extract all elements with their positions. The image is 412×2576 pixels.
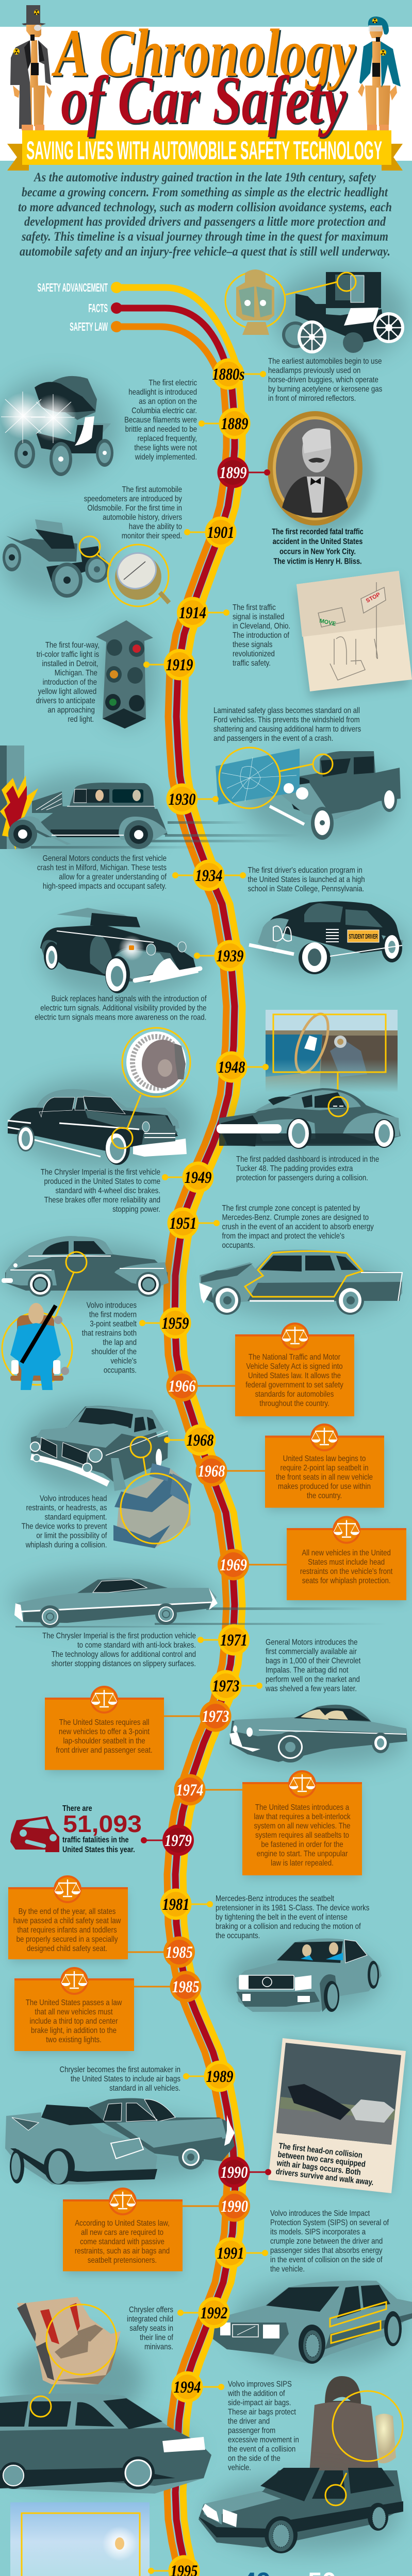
text: driver's education: The first driver's education program in	[248, 866, 362, 875]
text: GM airbags: perform well on the market and	[266, 1675, 360, 1684]
law box 1969: All new vehicles in the United	[302, 1549, 391, 1557]
text: first speedometers: The first automobile	[122, 485, 182, 494]
year badges: 1985	[172, 1977, 199, 1996]
text: Chrysler anti-lock brakes: shorter stopping distances on slippery surfaces.	[52, 1659, 196, 1668]
photo caption: with air bags occurs. Both	[276, 2159, 361, 2177]
law box 1968: United States law begins to	[283, 1454, 366, 1463]
1995: daytime running lights	[5, 2502, 191, 2576]
header	[0, 5, 412, 171]
1971: Chrysler Imperial anti-lock brakes	[10, 1571, 387, 1628]
text: crumple zone: from the impact and protect the vehicle's	[222, 1232, 344, 1241]
crash dummy in helmet	[358, 16, 401, 130]
law box 1968: the front seats in all new vehicle	[276, 1473, 373, 1482]
text: first recorded fatal accident: The victim is Henry H. Bliss.	[273, 557, 362, 566]
legend: SAFETY LAW	[70, 320, 108, 333]
1974: law box: be fastened in order for the	[261, 1840, 343, 1849]
icon: crashed car	[10, 1816, 59, 1852]
1939: Buick with turn signal	[40, 908, 206, 999]
student driver sign	[348, 930, 379, 942]
intro text: As the automotive industry gained traction in the late 19th century, safety	[33, 171, 376, 184]
text: seatbelt pretensioner: the occupants.	[216, 1931, 260, 1940]
text: earliest automobiles: headlamps previously used on	[268, 366, 360, 375]
year badges: 1968	[198, 1462, 225, 1481]
minivan	[0, 2393, 211, 2494]
text: Volvo head restraints: whiplash during a collision.	[25, 1540, 107, 1550]
text: Volvo 3-point seatbelt: that restrains both	[82, 1329, 137, 1338]
year labels: 1981	[162, 1895, 189, 1914]
seat	[17, 2297, 121, 2384]
law box 1969: seats for whiplash protection.	[302, 1577, 391, 1585]
text: GM airbags: Impalas. The airbag did not	[266, 1666, 349, 1675]
year labels: 1994	[174, 2378, 201, 2397]
year labels: 1889	[221, 414, 248, 433]
law box 1990: restraints, such as air bags and	[75, 2247, 170, 2256]
text: Chrysler disc brakes: These brakes offer more reliability and	[44, 1196, 160, 1205]
text: Volvo side-impact air bags: These air bags protect	[228, 2408, 296, 2417]
text: Chrysler disc brakes: produced in the United States to come	[44, 1177, 160, 1186]
text: seatbelt pretensioner: Mercedes-Benz introduces the seatbelt	[216, 1894, 334, 1903]
text: earliest automobiles: horse-driven buggies, which operate	[268, 376, 378, 384]
text: first four-way light: Michigan. The	[55, 669, 97, 677]
text: first four-way light: drivers to anticipate	[36, 697, 95, 705]
year labels: 1971	[220, 1631, 248, 1650]
law box 1990: seatbelt pretensioners.	[88, 2256, 157, 2265]
text: Volvo 3-point seatbelt: occupants.	[104, 1366, 137, 1375]
text: Volvo SIPS: in the event of collision on the side of	[270, 2256, 383, 2264]
text: Volvo side-impact air bags: Volvo improves SIPS	[228, 2380, 292, 2389]
year labels: 1948	[218, 1058, 245, 1077]
text: first speedometers: Oldsmobile. For the first time in	[87, 504, 182, 513]
text: GM airbags: first commercially available air	[266, 1647, 357, 1656]
year labels: 1919	[166, 655, 193, 674]
year labels: 1949	[185, 1168, 211, 1187]
seatbelt dummy	[2, 1303, 72, 1390]
year labels	[161, 365, 248, 2576]
text: first traffic signal: signal is installed	[233, 613, 284, 621]
text: Buick turn signals: electric turn signals means more awareness on the road.	[35, 1013, 206, 1022]
year badges	[159, 359, 251, 2576]
text: padded dashboard: The first padded dashboard is introduced in the	[236, 1155, 379, 1164]
1979: traffic fatalities fact: United States this year.	[62, 1845, 135, 1854]
law box 1966: The National Traffic and Motor	[249, 1353, 340, 1362]
law box 1966: Vehicle Safety Act is signed into	[246, 1362, 343, 1371]
text: laminated glass: Ford vehicles. This prevents the windshield from	[213, 716, 360, 724]
law box 1969	[287, 1516, 406, 1603]
text: Volvo head restraints: or limit the possibility of	[36, 1531, 107, 1540]
year labels: 1901	[207, 523, 234, 542]
law box 1985 brake light: include a third top and center	[29, 2017, 118, 2026]
1974: law box: system requires all seatbelts to	[255, 1831, 349, 1840]
year labels: 1968	[187, 1431, 213, 1450]
text: first four-way light: red light.	[68, 715, 94, 724]
text: first speedometers: have the ability to	[129, 522, 182, 531]
text: Volvo SIPS: passenger sides that absorbs energy	[270, 2246, 383, 2255]
1990: polaroid of head-on collision	[268, 2038, 406, 2193]
legend	[38, 281, 122, 333]
1974: law box	[242, 1770, 362, 1877]
law box 1985 brake light: brake light, in addition to the	[31, 2026, 117, 2035]
law box 1969: States must include head	[308, 1558, 385, 1567]
text: crumple zone: occupants.	[222, 1241, 255, 1250]
1901: Oldsmobile and speedometer	[0, 519, 169, 606]
text: first four-way light: introduction of the	[43, 678, 97, 687]
year labels: 1959	[162, 1314, 189, 1333]
text: Buick turn signals: Buick replaces hand signals with the introduction of	[52, 994, 207, 1004]
text: first traffic signal: revolutionized	[233, 650, 275, 658]
student driver sign: STUDENT DRIVER	[349, 933, 378, 940]
text: first electric headlight: widely implemented.	[135, 453, 197, 462]
text: first four-way light: tri-color traffic light is	[37, 650, 99, 659]
text: Chrysler air bags: the United States to include air bags	[71, 2075, 180, 2083]
1948: Tucker car	[217, 1088, 401, 1157]
1899: portrait of Henry H. Bliss	[268, 411, 374, 533]
1919: four-way traffic light	[95, 620, 157, 728]
1930: Ford truck and shattered windshield	[216, 748, 401, 842]
header white band	[0, 27, 412, 161]
text: padded dashboard: Tucker 48. The padding provides extra	[236, 1164, 353, 1173]
text: Volvo side-impact air bags: on the side of the	[228, 2454, 281, 2463]
1889: electric car with lights	[0, 376, 119, 479]
text: Volvo head restraints: restraints, or headrests, as	[26, 1503, 107, 1513]
law box 1985 brake light: that all new vehicles must	[35, 2008, 113, 2016]
year labels: 1939	[217, 946, 243, 965]
1973: law box: lap-shoulder seatbelt in the	[63, 1737, 145, 1745]
1880s: buggy with headlamp	[225, 268, 407, 361]
law box 1985 brake light: The United States passes a law	[26, 1998, 122, 2007]
text: GM airbags: was shelved a few years later.	[265, 1684, 357, 1693]
text: seatbelt pretensioner: pretensioner in its 1981 S-Class. The device works	[216, 1904, 369, 1912]
text: Volvo 3-point seatbelt: the first modern	[89, 1310, 137, 1319]
text: first recorded fatal accident: occurs in New York City.	[279, 547, 356, 556]
law box 1968	[265, 1423, 384, 1510]
year labels: 1951	[170, 1214, 196, 1233]
text: first four-way light: installed in Detroit,	[42, 659, 98, 668]
text: seatbelt pretensioner: by tightening the belt in the event of intense	[216, 1913, 348, 1922]
text: first electric headlight: these lights were not	[134, 444, 197, 452]
text: Chrysler disc brakes: standard with 4-wheel disc brakes.	[55, 1187, 160, 1195]
1974: law box: The United States introduces a	[255, 1803, 350, 1812]
1968: Volvo with head restraints	[21, 1401, 192, 1548]
year badges: 1990	[221, 2163, 248, 2182]
legend: SAFETY ADVANCEMENT	[38, 281, 108, 294]
text: earliest automobiles: by burning acetylene or kerosene gas	[268, 385, 382, 394]
text: GM crash test: General Motors conducts the first vehicle	[43, 854, 167, 863]
text: Volvo 3-point seatbelt: vehicle's	[111, 1357, 137, 1366]
text: first four-way light: an approaching	[47, 706, 95, 715]
law box 1966: United States law. It allows the	[248, 1371, 341, 1380]
law box 1968: require 2-point lap seatbelt in	[280, 1464, 369, 1472]
text: Chrysler child seats: safety seats in	[129, 2324, 173, 2333]
headlamp callout	[225, 269, 356, 335]
text: Chrysler air bags: Chrysler becomes the first automaker in	[60, 2065, 180, 2074]
1930: crash test car	[0, 745, 299, 866]
text: Volvo head restraints: standard equipment.	[45, 1513, 107, 1522]
text: Volvo side-impact air bags: passenger from	[228, 2426, 275, 2435]
text: GM airbags: bags in 1,000 of their Chevrolet	[266, 1656, 360, 1666]
text: Chrysler anti-lock brakes: The technology allows for additional control and	[52, 1650, 196, 1659]
law box 1985 child seat: designed child safety seat.	[27, 1944, 107, 1953]
text: Chrysler child seats: Chrysler offers	[129, 2306, 173, 2314]
year badges: 1899	[220, 463, 246, 482]
text: Volvo side-impact air bags: with the addition of	[227, 2389, 285, 2398]
text: crumple zone: Mercedes-Benz. Crumple zones are designed to	[222, 1213, 369, 1222]
year badges: 1969	[220, 1555, 247, 1574]
text: first electric headlight: headlight is introduced	[128, 388, 197, 397]
year labels: 1914	[179, 603, 206, 622]
law box 1985 brake light: two existing lights.	[46, 2036, 102, 2044]
text: first electric headlight: Because filaments were	[124, 416, 197, 425]
1974: law box: engine to start. The unpopular	[257, 1850, 348, 1858]
text: Chrysler disc brakes: The Chrysler Imperial is the first vehicle	[41, 1168, 160, 1177]
text: first electric headlight: as an option on the	[139, 397, 197, 406]
text: Chrysler anti-lock brakes: The Chrysler Imperial is the first production vehicle	[42, 1632, 196, 1640]
text: Chrysler child seats: minivans.	[144, 2343, 173, 2351]
year labels: 1934	[195, 866, 222, 885]
text: Volvo side-impact air bags: side-impact air bags.	[228, 2398, 291, 2408]
law box 1966: standards for automobiles	[255, 1390, 334, 1399]
photo caption: drivers survive and walk away.	[275, 2167, 374, 2188]
crash dummy in top hat	[10, 5, 52, 130]
speedometer callout	[79, 536, 169, 606]
law box 1990: all new cars are required to	[81, 2228, 163, 2237]
text: first traffic signal: The introduction of	[233, 631, 290, 640]
1974: law box: law that requires a belt-interlock	[254, 1812, 351, 1821]
text: driver's education: the United States is launched at a high	[248, 875, 365, 884]
text: Volvo 3-point seatbelt: shoulder of the	[91, 1347, 137, 1357]
1948: dashboard image	[266, 1010, 398, 1097]
text: Chrysler disc brakes: stopping power.	[112, 1205, 160, 1214]
intro text	[18, 171, 392, 259]
photo caption: between two cars equipped	[277, 2150, 366, 2169]
law box 1966	[235, 1323, 354, 1419]
text: Volvo SIPS: Volvo introduces the Side Impact	[270, 2209, 370, 2218]
1979: traffic fatalities fact: traffic fatalities in the	[62, 1836, 129, 1844]
text: first speedometers: speedometers are introduced by	[84, 495, 183, 503]
1992: child seat and minivan	[10, 2297, 144, 2421]
1989: Chrysler cars	[5, 2098, 235, 2184]
text: Volvo side-impact air bags: excessive movement in	[228, 2435, 299, 2445]
text: crumple zone: The first crumple zone concept is patented by	[222, 1204, 360, 1213]
law box 1985 child seat: that requires infants and toddlers	[17, 1926, 117, 1935]
year badges: 1973	[202, 1707, 229, 1726]
text: GM crash test: crash test in Milford, Michigan. These tests	[37, 863, 167, 872]
year labels: 1930	[169, 790, 195, 809]
1973: law box: The United States requires all	[59, 1718, 149, 1727]
text: first traffic signal: in Cleveland, Ohio.	[233, 622, 290, 631]
49 of 50 states fact	[241, 2567, 367, 2576]
text: GM crash test: high-speed impacts and occupant safety.	[43, 882, 167, 891]
text: padded dashboard: protection for passengers during a collision.	[236, 1174, 368, 1182]
law box 1990: come standard with passive	[80, 2238, 164, 2246]
text: Volvo SIPS: the vehicle.	[270, 2265, 305, 2274]
text: Volvo side-impact air bags: vehicle.	[228, 2463, 251, 2472]
text: first traffic signal: traffic safety.	[233, 659, 271, 668]
text: Volvo head restraints: The device works to prevent	[22, 1522, 107, 1531]
year labels: 1991	[217, 2244, 244, 2263]
text: first four-way light: yellow light allowed	[38, 687, 96, 696]
law box 1968: makes produced for use within	[278, 1482, 371, 1491]
ribbon: subtitle banner	[7, 130, 403, 171]
law box 1985 child seat	[8, 1875, 128, 1962]
1981: Mercedes S-Class	[227, 1938, 382, 2014]
year badges: 1985	[166, 1943, 193, 1962]
1973: law box: front driver and passenger seat.	[56, 1746, 153, 1755]
text: first electric headlight: The first electric	[149, 379, 197, 387]
text: Volvo head restraints: Volvo introduces head	[40, 1494, 107, 1503]
photo caption: The first head-on collision	[278, 2142, 363, 2160]
1979: traffic fatalities fact: There are	[62, 1804, 92, 1813]
year badges: 1979	[164, 1831, 192, 1850]
1974: law box: system on all new vehicles. The	[254, 1822, 351, 1831]
text: laminated glass: shattering and causing additional harm to drivers	[213, 725, 361, 734]
text: seatbelt pretensioner: braking or a collision and reducing the motion of	[216, 1922, 361, 1931]
year labels: 1989	[206, 2067, 233, 2086]
year labels: 1880s	[212, 365, 245, 384]
legend: FACTS	[88, 302, 108, 315]
text: Chrysler anti-lock brakes: to come standard with anti-lock brakes.	[77, 1641, 196, 1650]
text: first speedometers: automobile history, drivers	[103, 513, 182, 522]
year badges: 1990	[221, 2197, 248, 2216]
text: earliest automobiles: The earliest automobiles begin to use	[268, 357, 382, 366]
1949: Chrysler Imperial with disc brake	[8, 1028, 196, 1170]
1994: seat with side airbag	[309, 2376, 403, 2473]
law box 1966: federal government to set safety	[245, 1381, 343, 1389]
1973: Impala with airbag	[229, 1705, 407, 1767]
text: first recorded fatal accident: The first recorded fatal traffic	[272, 528, 364, 536]
law box 1968: the country.	[307, 1492, 342, 1500]
1934: student driver car	[249, 901, 407, 974]
year labels: 1973	[212, 1676, 239, 1696]
text: first four-way light: The first four-way,	[45, 641, 100, 650]
text: Volvo SIPS: crumple zone between the driver and	[270, 2237, 383, 2246]
disc brake callout	[112, 1028, 190, 1148]
law box 1985 brake light	[14, 1967, 134, 2053]
year labels: 1992	[201, 2303, 227, 2323]
text: first speedometers: monitor their speed.	[122, 532, 182, 540]
law box 1985 child seat: be properly secured in a specially	[17, 1935, 118, 1944]
text: Volvo 3-point seatbelt: 3-point seatbelt	[90, 1319, 137, 1329]
text: Chrysler child seats: their line of	[140, 2333, 174, 2342]
1914: traffic signal drawing: STOP	[365, 591, 382, 604]
law box 1969: restraints on the vehicle's front	[300, 1567, 392, 1576]
text: earliest automobiles: in front of mirrored reflectors.	[268, 394, 356, 403]
law box 1990: According to United States law,	[75, 2219, 170, 2228]
text: first electric headlight: Columbia electric car.	[131, 406, 197, 415]
law box 1966: throughout the country.	[259, 1399, 329, 1408]
text: crumple zone: crush in the event of an accident to absorb energy	[222, 1223, 374, 1231]
text: Chrysler child seats: integrated child	[127, 2315, 173, 2324]
1979: traffic fatalities fact	[10, 1804, 142, 1854]
connectors	[128, 371, 287, 2576]
1914: traffic signal drawing	[296, 571, 412, 698]
text: first electric headlight: brittle and needed to be	[125, 425, 197, 434]
year badges: 1966	[169, 1377, 195, 1396]
seats callout	[113, 1463, 192, 1548]
1994: Volvo wagon	[199, 2468, 403, 2553]
text: laminated glass: and passengers in the event of a crash.	[213, 734, 333, 743]
text: GM crash test: allow for a greater understanding of	[59, 873, 167, 882]
text: first electric headlight: replaced frequently,	[137, 434, 197, 443]
law box 1990	[63, 2188, 183, 2274]
text: Buick turn signals: electric turn signals. Additional visibility provided by the	[40, 1004, 206, 1013]
1914: traffic signal drawing: MOVE	[319, 618, 337, 628]
law box 1985 child seat: have passed a child safety seat law	[13, 1917, 121, 1925]
text: Volvo 3-point seatbelt: the lap and	[103, 1338, 137, 1347]
text: laminated glass: Laminated safety glass becomes standard on all	[213, 706, 360, 715]
timeline road	[117, 287, 243, 2576]
1959: Volvo with seatbelt	[0, 1236, 175, 1390]
1973: law box: new vehicles to offer a 3-point	[59, 1727, 150, 1736]
text: driver's education: school in State College, Pennsylvania.	[248, 885, 364, 893]
text: Volvo SIPS: its models. SIPS incorporates a	[270, 2228, 366, 2236]
text: GM airbags: General Motors introduces the	[266, 1638, 357, 1647]
text: first recorded fatal accident: accident in the United States	[273, 537, 362, 547]
law box 1985 child seat: By the end of the year, all states	[19, 1907, 116, 1916]
text: Volvo 3-point seatbelt: Volvo introduces	[87, 1301, 137, 1310]
text: Chrysler air bags: standard in all vehicles.	[109, 2084, 180, 2093]
1951: crumple zone car	[199, 1250, 402, 1319]
1973: law box	[45, 1686, 164, 1772]
year badges: 1974	[176, 1781, 203, 1800]
text: Volvo side-impact air bags: the event of a collision	[228, 2445, 295, 2454]
text: Volvo SIPS: Protection System (SIPS) on several of	[270, 2218, 389, 2227]
text: first traffic signal: The first traffic	[233, 603, 276, 612]
1991: Volvo with SIPS	[213, 2280, 412, 2367]
text: Volvo side-impact air bags: the driver and	[228, 2417, 270, 2426]
text: first traffic signal: these signals	[233, 640, 272, 649]
1979: traffic fatalities fact: 51,093	[63, 1810, 142, 1837]
1974: law box: law is later repealed.	[271, 1859, 334, 1868]
